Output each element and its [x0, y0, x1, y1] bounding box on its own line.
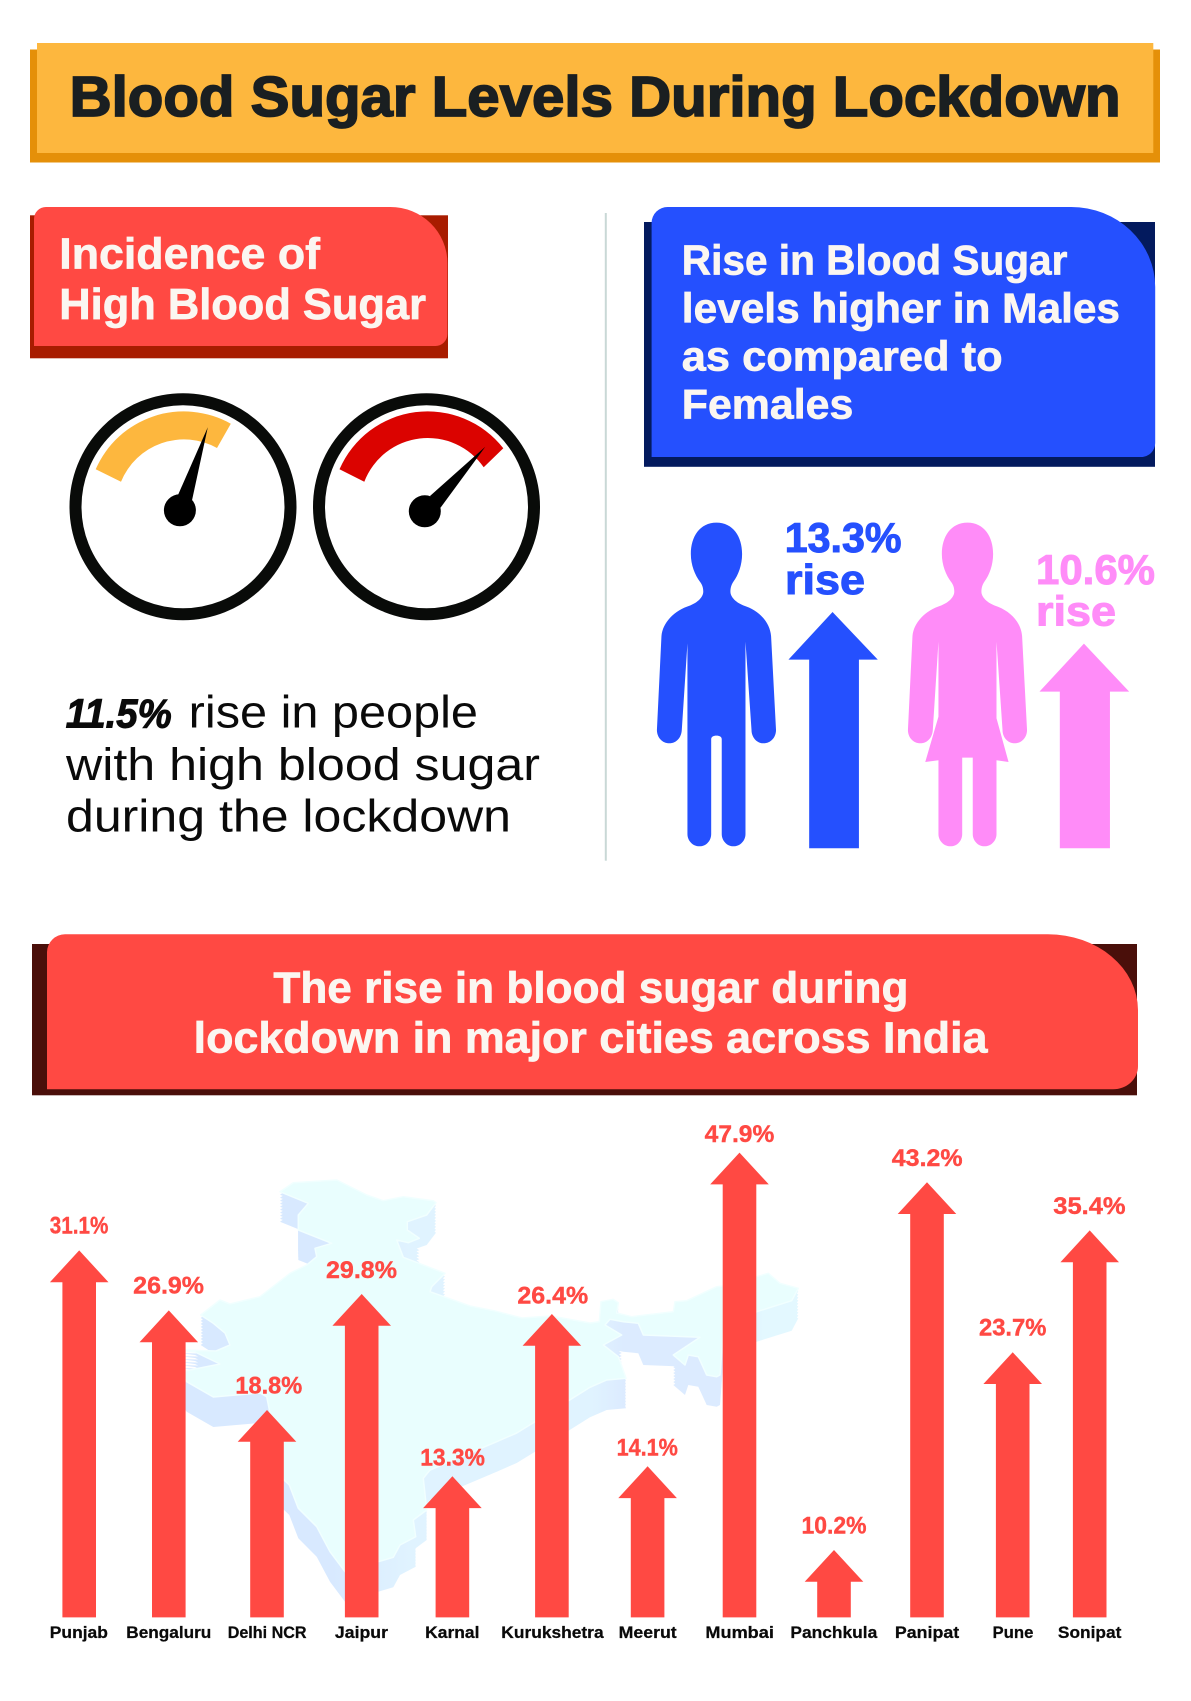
city: Bengaluru: Bengaluru: [126, 1623, 211, 1642]
city: Jaipur: [326, 1257, 397, 1642]
icon: amber gauge: [76, 399, 290, 614]
city: Sonipat: 35.4%: [1053, 1193, 1126, 1220]
panel: male vs female heading: Rise in Blood Sugar: [682, 237, 1067, 284]
text block: 11.5% rise: [65, 686, 540, 842]
city: Bengaluru: [126, 1273, 211, 1642]
label: 13.3% rise: rise: [785, 556, 865, 603]
city: Meerut: 14.1%: [617, 1435, 678, 1462]
label: 10.6% rise: [1036, 546, 1155, 635]
city: Panchkula: 10.2%: [802, 1512, 866, 1539]
city: Delhi NCR: [228, 1373, 306, 1642]
city: Panchkula: [790, 1512, 878, 1642]
text block: 11.5% rise: with high blood sugar: [65, 739, 540, 790]
city: Punjab: Punjab: [50, 1623, 108, 1642]
map of India background: [180, 1180, 798, 1602]
city: Karnal: [420, 1445, 485, 1642]
city: Punjab: 31.1%: [50, 1213, 108, 1240]
city: Meerut: [617, 1435, 678, 1642]
city: Jaipur: 29.8%: [326, 1257, 397, 1284]
panel: male vs female heading: [644, 207, 1155, 467]
text block: 11.5% rise: rise in people: [189, 686, 478, 737]
city: Mumbai: 47.9%: [705, 1121, 774, 1148]
city: Panipat: 43.2%: [892, 1145, 963, 1172]
icon: red gauge: [319, 399, 534, 614]
city: Karnal: 13.3%: [420, 1445, 485, 1472]
panel: male vs female heading: as compared to: [682, 333, 1003, 380]
panel: cities heading: [32, 934, 1138, 1095]
label: 10.6% rise: 10.6%: [1036, 546, 1155, 593]
panel: male vs female heading: levels higher in Males: [682, 285, 1120, 332]
text block: 11.5% rise: 11.5%: [66, 690, 172, 736]
city: Panipat: Panipat: [895, 1623, 960, 1642]
city: Sonipat: Sonipat: [1058, 1623, 1122, 1642]
panel: cities heading: The rise in blood sugar during: [273, 964, 908, 1013]
city: Kurukshetra: 26.4%: [517, 1283, 588, 1310]
city: Panipat: [892, 1145, 963, 1642]
label: 13.3% rise: 13.3%: [785, 514, 902, 561]
panel: cities heading: lockdown in major cities across India: [194, 1014, 988, 1063]
city: Karnal: Karnal: [425, 1623, 480, 1642]
city: Pune: Pune: [992, 1623, 1033, 1642]
title banner: [30, 43, 1160, 162]
city: Mumbai: [705, 1121, 774, 1642]
panel: male vs female heading: Females: [682, 381, 853, 428]
icon: female figure: [908, 523, 1027, 846]
icon: male figure: [657, 523, 776, 846]
panel: incidence heading: [30, 207, 448, 358]
city: Kurukshetra: [501, 1283, 604, 1642]
arrow: male rise: [788, 612, 878, 848]
city: Delhi NCR: 18.8%: [235, 1373, 302, 1400]
city: Bengaluru: 26.9%: [133, 1273, 204, 1300]
city: Sonipat: [1053, 1193, 1126, 1642]
city: Kurukshetra: Kurukshetra: [501, 1623, 604, 1642]
city: Meerut: Meerut: [619, 1623, 677, 1642]
city: Panchkula: Panchkula: [790, 1623, 878, 1642]
arrow: female rise: [1039, 644, 1129, 848]
label: 13.3% rise: [785, 514, 902, 603]
text block: 11.5% rise: during the lockdown: [66, 791, 511, 842]
city: Pune: [979, 1315, 1046, 1642]
city: Punjab: [50, 1213, 108, 1642]
label: 10.6% rise: rise: [1036, 588, 1116, 635]
city: Mumbai: Mumbai: [705, 1623, 774, 1642]
city: Jaipur: Jaipur: [335, 1623, 388, 1642]
city: Pune: 23.7%: [979, 1315, 1046, 1342]
city: Delhi NCR: Delhi NCR: [228, 1623, 306, 1642]
panel: incidence heading: High Blood Sugar: [59, 280, 426, 329]
bar chart: rise by city: [50, 1121, 1126, 1642]
panel: incidence heading: Incidence of: [59, 230, 320, 279]
title: Blood Sugar Levels During Lockdown: [70, 65, 1121, 129]
